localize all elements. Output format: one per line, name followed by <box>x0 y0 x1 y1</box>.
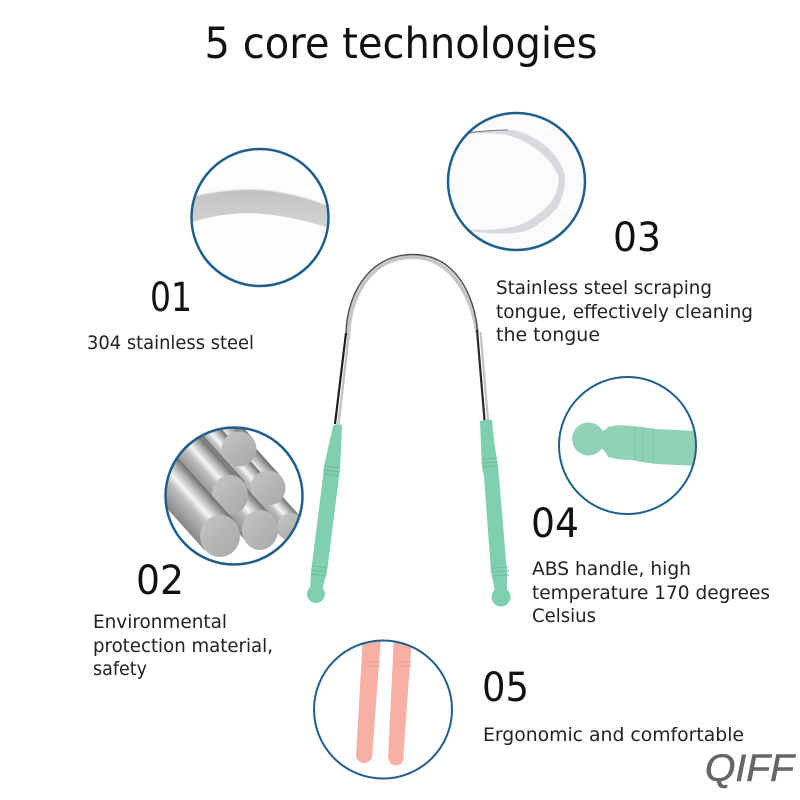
number 01: 01 <box>150 275 192 321</box>
text: ergonomic: Ergonomic and comfortable <box>483 724 744 746</box>
text: ABS handle <box>532 558 770 627</box>
icon: scraper arch closeup <box>447 112 587 252</box>
text: ABS handle: temperature 170 degrees <box>532 582 770 604</box>
text: 304 stainless steel: 304 stainless steel <box>87 332 254 354</box>
panel: 02 environmental material <box>94 426 304 679</box>
text: stainless steel scraping: Stainless steel scraping <box>496 277 712 299</box>
steel band <box>335 254 488 424</box>
text: stainless steel scraping: the tongue <box>496 324 600 346</box>
text: environmental protection: Environmental <box>93 611 227 633</box>
left handle <box>307 424 342 603</box>
number 02: 02 <box>136 558 184 604</box>
number 04: 04 <box>531 501 579 547</box>
text: environmental protection: protection material, <box>93 635 273 657</box>
tongue scraper <box>307 254 510 606</box>
panel: 04 ABS handle <box>531 377 770 627</box>
text: environmental protection: safety <box>93 658 147 680</box>
text: stainless steel scraping <box>496 277 753 346</box>
title: 5 core technologies <box>204 19 598 69</box>
panel: 03 scraping tongue <box>447 112 753 346</box>
icon: pink handles closeup <box>314 636 452 778</box>
icon: steel rods closeup <box>164 426 304 566</box>
panel: 01 stainless steel <box>87 148 332 354</box>
text: environmental protection <box>93 611 273 680</box>
icon: steel edge closeup <box>186 148 332 288</box>
text: ABS handle: ABS handle, high <box>532 558 691 580</box>
watermark: QIFF: QIFF <box>705 748 796 790</box>
icon: handle closeup <box>559 377 700 514</box>
text: ABS handle: Celsius <box>532 605 596 627</box>
panel: 05 ergonomic <box>314 636 744 778</box>
number 05: 05 <box>482 665 529 711</box>
right handle <box>480 420 510 606</box>
number 03: 03 <box>613 215 661 261</box>
text: stainless steel scraping: tongue, effectively cleaning <box>496 301 753 323</box>
